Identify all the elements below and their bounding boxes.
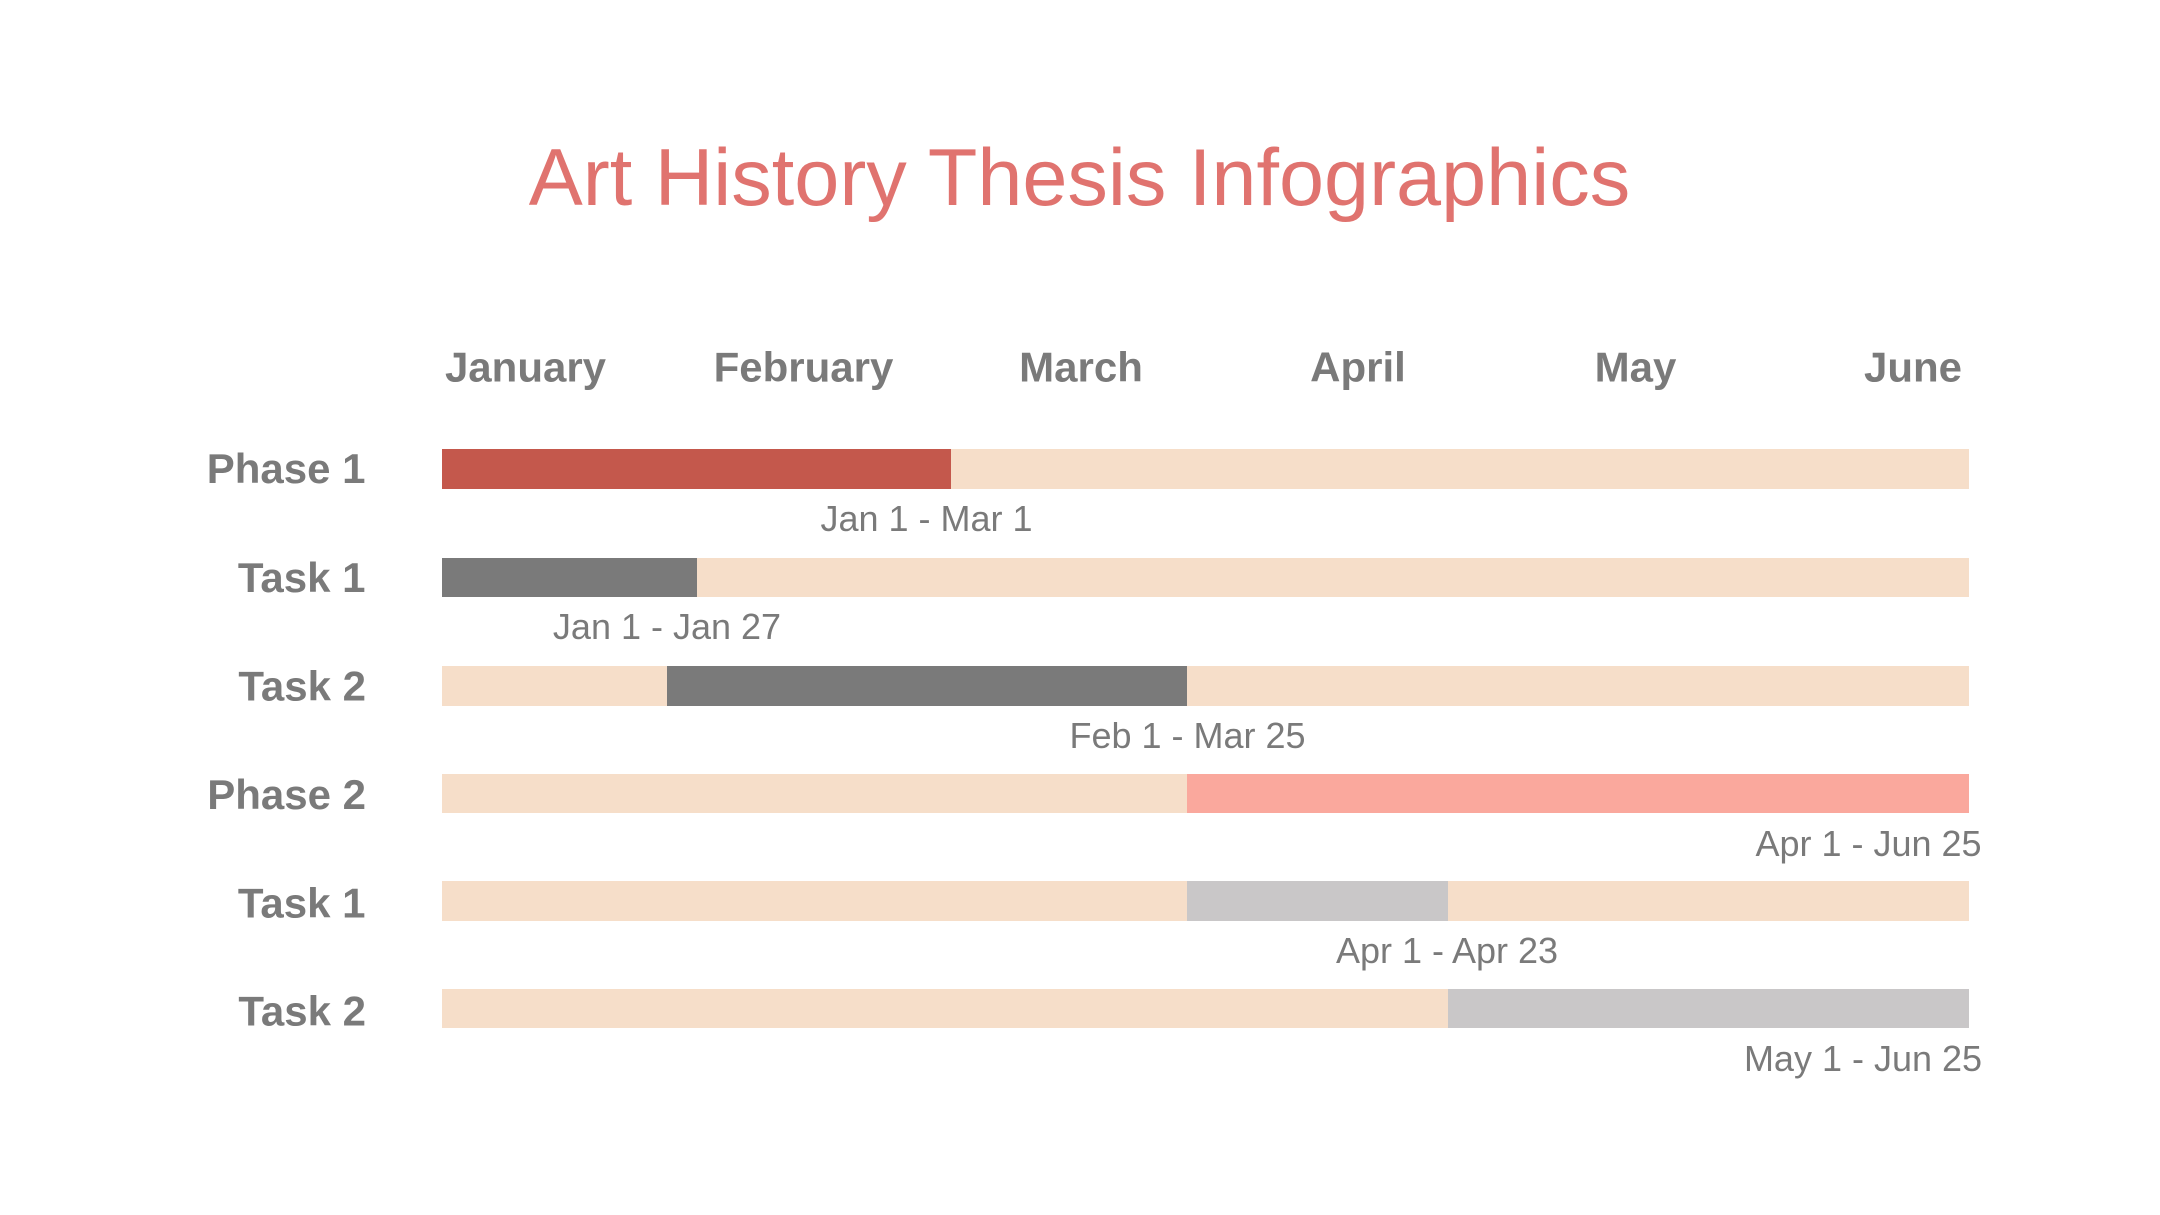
- row: Task 1: Jan 1 - Jan 27: [553, 606, 781, 647]
- row: Phase 1: Jan 1 - Mar 1: [820, 498, 1033, 539]
- row: Task 2 (Phase 2): May 1 - Jun 25: [1744, 1038, 1982, 1079]
- row: Phase 2: Phase 2: [207, 771, 366, 818]
- row: Task 2 (Phase 2): Task 2: [238, 988, 366, 1034]
- row: Task 2: [238, 662, 1969, 756]
- row: Task 1 (Phase 2): Task 1: [238, 880, 366, 926]
- month headers: March: [1019, 344, 1143, 390]
- month headers: [445, 344, 1962, 390]
- title: Art History Thesis Infographics: [529, 133, 1630, 223]
- row: Phase 2: [207, 771, 1982, 864]
- row: Task 1: Task 1: [238, 554, 366, 601]
- row: Phase 1: [207, 445, 1969, 539]
- row: Task 2 (Phase 2): [238, 988, 1982, 1079]
- month headers: April: [1310, 344, 1406, 390]
- row: Task 2: Feb 1 - Mar 25: [1069, 715, 1306, 756]
- row: Task 1: [238, 554, 1969, 647]
- month headers: May: [1595, 344, 1677, 390]
- row: Task 1 (Phase 2): Apr 1 - Apr 23: [1336, 930, 1558, 971]
- row: Task 2: Task 2: [238, 662, 366, 710]
- month headers: February: [714, 344, 894, 390]
- month headers: June: [1864, 344, 1962, 390]
- row: Phase 2: Apr 1 - Jun 25: [1755, 823, 1982, 864]
- row: Phase 1: Phase 1: [207, 445, 366, 492]
- month headers: January: [445, 344, 607, 390]
- row: Task 1 (Phase 2): [238, 880, 1969, 971]
